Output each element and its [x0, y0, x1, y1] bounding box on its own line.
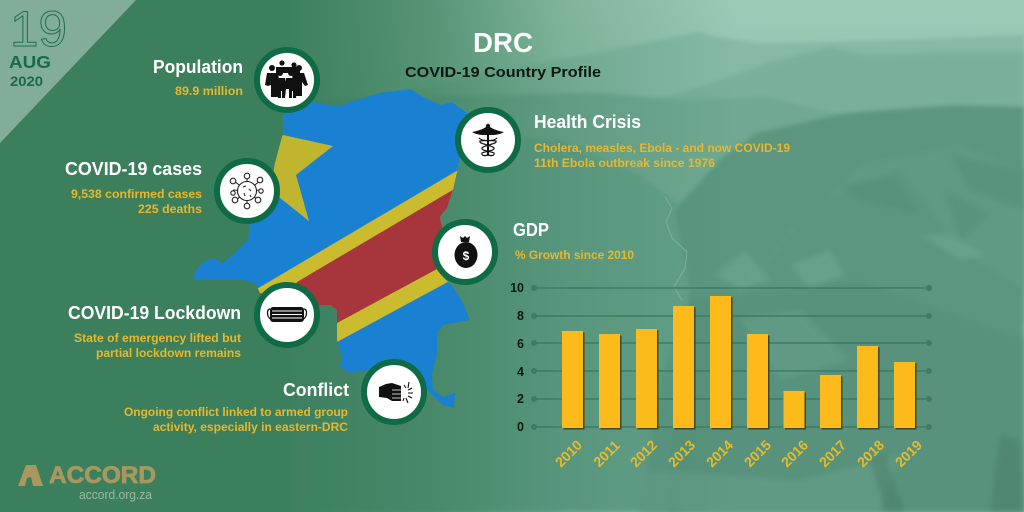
bar chart: GDP growth 2010-2019: 2014 [703, 437, 736, 470]
health crisis block [458, 110, 790, 170]
bar chart: GDP growth 2010-2019: 2018 [854, 437, 887, 470]
health crisis block: Health Crisis [534, 112, 641, 132]
bar chart: GDP growth 2010-2019: 2013 [665, 437, 698, 470]
bar chart: GDP growth 2010-2019: 6 [517, 337, 524, 351]
COVID-19 cases block [65, 159, 277, 221]
bar chart: GDP growth 2010-2019: 4 [517, 365, 524, 379]
flag star [274, 135, 333, 221]
flag yellow stripe [258, 170, 458, 342]
bar chart: GDP growth 2010-2019 [510, 281, 932, 470]
DRC map with flag [193, 89, 470, 408]
health crisis block: 11th Ebola outbreak since 1976 [534, 156, 715, 170]
date corner panel: AUG [9, 52, 51, 72]
ACCORD logo: accord.org.za [79, 488, 152, 502]
title [405, 27, 601, 81]
flag red stripe [296, 190, 453, 323]
conflict block: activity, especially in eastern-DRC [153, 420, 348, 434]
bar chart: GDP growth 2010-2019: 8 [517, 309, 524, 323]
date corner panel [0, 0, 136, 143]
bar chart: GDP growth 2010-2019: 2019 [892, 437, 925, 470]
title: DRC [473, 27, 533, 58]
bar chart: GDP growth 2010-2019: 2 [517, 392, 524, 406]
bar chart: GDP growth 2010-2019: 2010 [552, 437, 585, 470]
bar chart: GDP growth 2010-2019: 2011 [590, 437, 623, 470]
GDP block [435, 220, 634, 282]
GDP block: % Growth since 2010 [515, 248, 634, 262]
COVID-19 lockdown block: State of emergency lifted but [74, 331, 241, 345]
icon: virus [230, 173, 263, 209]
date corner panel: 19 [10, 1, 67, 57]
icon: face mask [267, 307, 307, 322]
bar chart: GDP growth 2010-2019: 10 [510, 281, 524, 295]
COVID-19 lockdown block [68, 285, 317, 360]
population block: 89.9 million [175, 84, 243, 98]
conflict block: Ongoing conflict linked to armed group [124, 405, 348, 419]
ACCORD logo: ACCORD [49, 462, 156, 489]
icon: fist [379, 382, 413, 403]
icon: people [265, 60, 308, 98]
icon: money bag: $ [463, 249, 470, 263]
COVID-19 lockdown block: COVID-19 Lockdown [68, 303, 241, 323]
conflict block: Conflict [283, 380, 349, 400]
GDP block: GDP [513, 220, 549, 240]
conflict block [124, 362, 424, 434]
COVID-19 cases block: 9,538 confirmed cases [71, 187, 202, 201]
icon: caduceus [472, 124, 504, 156]
bar chart: GDP growth 2010-2019: 0 [517, 420, 524, 434]
COVID-19 lockdown block: partial lockdown remains [96, 346, 241, 360]
population block: Population [153, 57, 243, 77]
COVID-19 cases block: 225 deaths [138, 202, 202, 216]
bar chart: GDP growth 2010-2019: 2012 [627, 437, 660, 470]
bar chart: GDP growth 2010-2019: 2015 [741, 437, 774, 470]
ACCORD logo [18, 462, 156, 502]
COVID-19 cases block: COVID-19 cases [65, 159, 202, 179]
health crisis block: Cholera, measles, Ebola - and now COVID-19 [534, 141, 790, 155]
date corner panel: 2020 [10, 74, 43, 89]
population block [153, 50, 317, 110]
title: COVID-19 Country Profile [405, 64, 601, 81]
bar chart: GDP growth 2010-2019: 2017 [816, 437, 849, 470]
bar chart: GDP growth 2010-2019: 2016 [778, 437, 811, 470]
icon: money bag [454, 236, 478, 268]
